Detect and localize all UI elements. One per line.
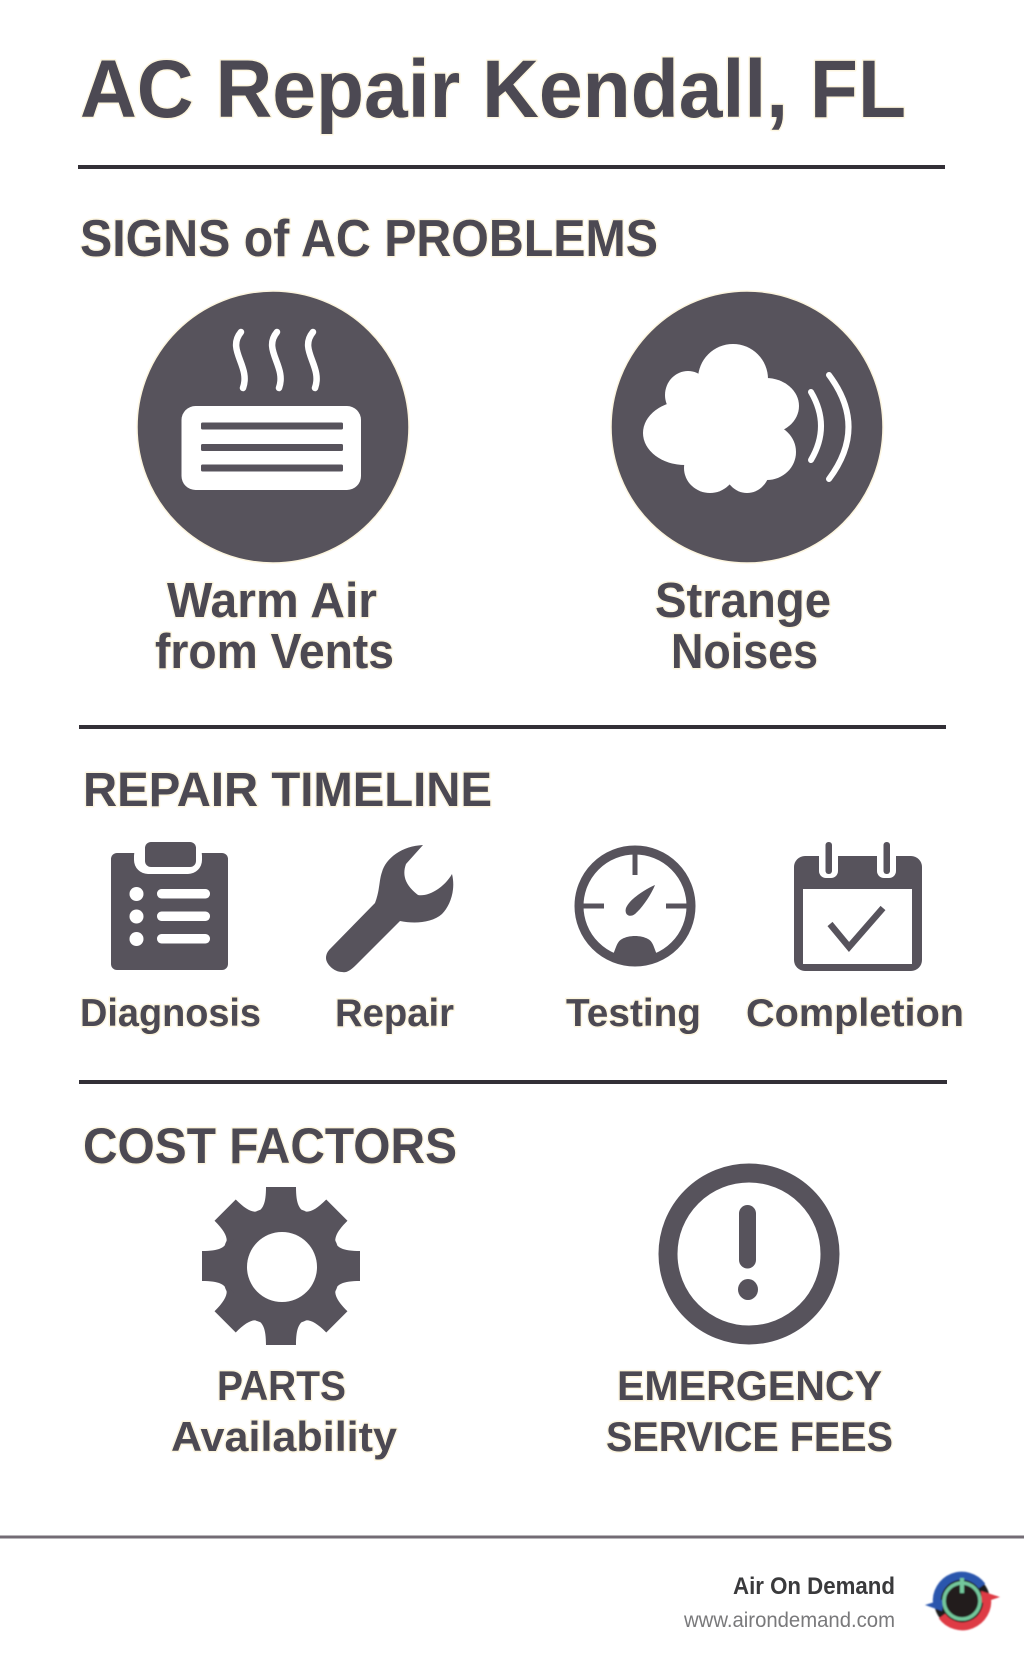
label: parts availability: Availability xyxy=(171,1413,398,1460)
heading: repair timeline: REPAIR TIMELINE xyxy=(83,764,492,817)
icon: logo xyxy=(925,1573,1000,1629)
label: emergency service fees xyxy=(606,1362,893,1460)
label: repair: Repair xyxy=(335,992,454,1035)
footer brand name: Air On Demand xyxy=(733,1573,895,1600)
footer xyxy=(683,1573,1000,1632)
panel: cost factors xyxy=(83,1118,893,1460)
label: testing: Testing xyxy=(566,992,701,1035)
footer url: www.airondemand.com xyxy=(683,1609,895,1632)
label: parts availability xyxy=(171,1362,398,1460)
heading: cost factors: COST FACTORS xyxy=(83,1118,457,1174)
heading: signs: SIGNS of AC PROBLEMS xyxy=(80,210,658,268)
title: AC Repair Kendall, FL xyxy=(80,44,906,135)
panel: signs of AC problems xyxy=(80,210,883,679)
label: warm air from vents: from Vents xyxy=(155,625,394,679)
icon: warm air vent xyxy=(137,291,409,563)
label: completion: Completion xyxy=(746,992,964,1035)
label: strange noises xyxy=(655,574,831,679)
icon: calendar xyxy=(794,842,922,971)
label: diagnosis: Diagnosis xyxy=(80,992,261,1035)
panel: repair timeline xyxy=(80,764,964,1035)
label: warm air from vents xyxy=(155,574,394,679)
icon: clipboard xyxy=(111,842,228,970)
label: parts availability: PARTS xyxy=(217,1362,346,1409)
icon: wrench xyxy=(326,845,453,972)
label: emergency service fees: EMERGENCY xyxy=(617,1362,882,1409)
icon: strange noises cloud xyxy=(611,291,883,563)
icon: exclamation xyxy=(668,1173,830,1335)
label: strange noises: Strange xyxy=(655,574,831,628)
label: warm air from vents: Warm Air xyxy=(167,574,377,628)
label: emergency service fees: SERVICE FEES xyxy=(606,1413,893,1460)
icon: gear xyxy=(202,1187,360,1345)
label: strange noises: Noises xyxy=(671,625,818,679)
icon: gauge xyxy=(579,850,691,965)
